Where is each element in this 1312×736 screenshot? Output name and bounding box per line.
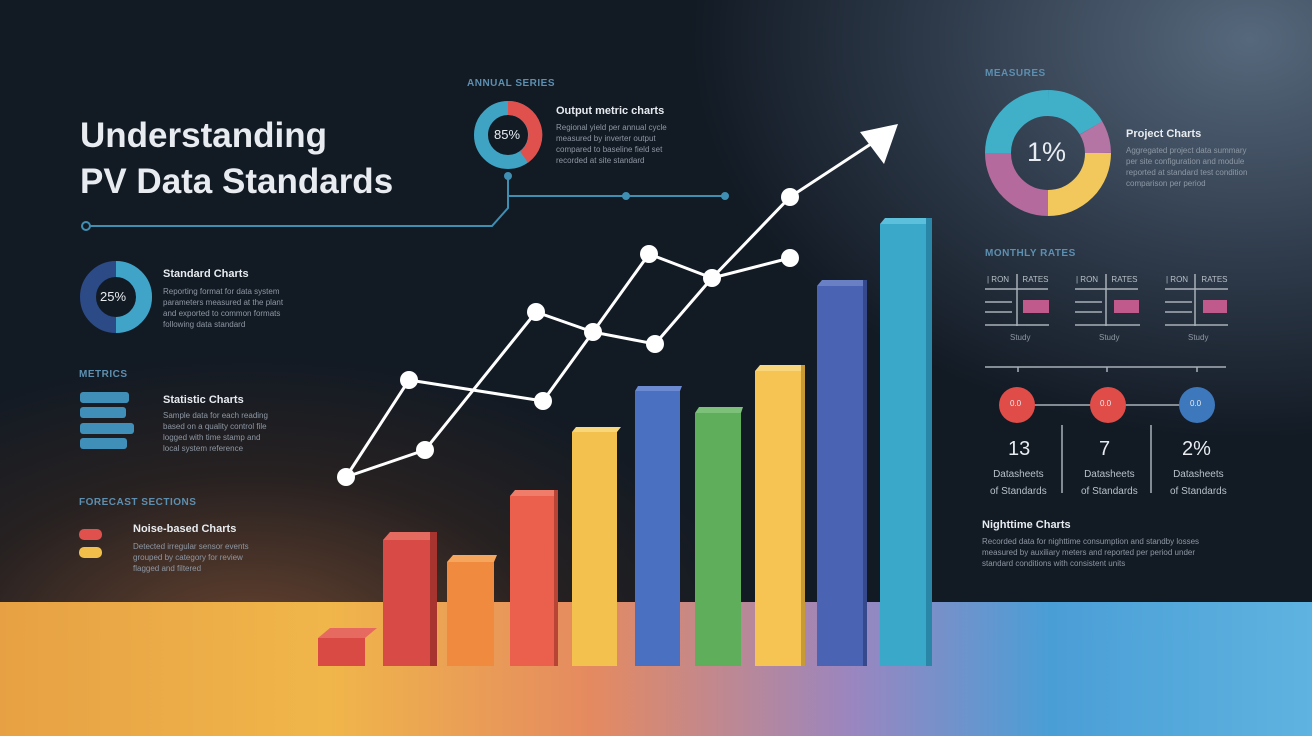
tables	[985, 274, 1228, 493]
text: logged with time stamp and	[163, 433, 260, 442]
text: of Standards	[1170, 486, 1227, 497]
donut labels: 85%	[494, 127, 520, 142]
text: FORECAST SECTIONS	[79, 497, 196, 508]
donut 85%	[481, 108, 535, 162]
text: Reporting format for data system	[163, 287, 280, 296]
text: Nighttime Charts	[982, 519, 1071, 531]
donut 1%	[998, 103, 1098, 203]
text: | RON RATES	[1166, 275, 1228, 284]
title: PV Data Standards	[80, 162, 393, 201]
text: Statistic Charts	[163, 394, 244, 406]
text: reported at standard test condition	[1126, 168, 1247, 177]
text: Datasheets	[1173, 469, 1224, 480]
text: parameters measured at the plant	[163, 298, 283, 307]
text: compared to baseline field set	[556, 145, 662, 154]
text: of Standards	[990, 486, 1047, 497]
text: Detected irregular sensor events	[133, 542, 249, 551]
text: Datasheets	[993, 469, 1044, 480]
text: 2%	[1182, 438, 1211, 460]
text: 0.0	[1010, 399, 1021, 408]
text: Standard Charts	[163, 268, 249, 280]
floor	[0, 602, 1312, 736]
text: measured by auxiliary meters and reported per period under	[982, 548, 1195, 557]
connector line	[82, 173, 728, 230]
text: measured by inverter output	[556, 134, 656, 143]
title: Understanding	[80, 116, 327, 155]
text: 25%	[100, 289, 126, 304]
text blocks: Output metric charts	[556, 105, 664, 117]
title	[80, 116, 393, 201]
text: Recorded data for nighttime consumption and standby losses	[982, 537, 1199, 546]
line chart with arrow	[337, 124, 898, 486]
text: | RON RATES	[1076, 275, 1138, 284]
text: Study	[1099, 333, 1119, 342]
text: based on a quality control file	[163, 422, 267, 431]
text: Noise-based Charts	[133, 523, 236, 535]
text: local system reference	[163, 444, 243, 453]
section labels: ANNUAL SERIES	[467, 78, 555, 89]
text: Aggregated project data summary	[1126, 146, 1247, 155]
text: METRICS	[79, 369, 128, 380]
text: MONTHLY RATES	[985, 248, 1076, 259]
text: 1%	[1027, 137, 1066, 167]
text: recorded at site standard	[556, 156, 644, 165]
circles	[999, 387, 1035, 423]
text: standard conditions with consistent units	[982, 559, 1125, 568]
bar chart	[318, 218, 932, 666]
text: and exported to common formats	[163, 309, 280, 318]
donut 25%	[88, 269, 144, 325]
text: Project Charts	[1126, 128, 1201, 140]
text: grouped by category for review	[133, 553, 243, 562]
text: 0.0	[1190, 399, 1201, 408]
text: comparison per period	[1126, 179, 1206, 188]
text: of Standards	[1081, 486, 1138, 497]
text: MEASURES	[985, 68, 1046, 79]
table headers: | RON RATES	[987, 275, 1048, 284]
text: Regional yield per annual cycle	[556, 123, 667, 132]
text: Study	[1010, 333, 1030, 342]
text: following data standard	[163, 320, 245, 329]
text: Datasheets	[1084, 469, 1135, 480]
text: Study	[1188, 333, 1208, 342]
mini bars	[80, 392, 134, 449]
text: 0.0	[1100, 399, 1111, 408]
text: Sample data for each reading	[163, 411, 268, 420]
text: 7	[1099, 438, 1110, 460]
stats: 13	[1008, 438, 1030, 460]
text: flagged and filtered	[133, 564, 201, 573]
text: per site configuration and module	[1126, 157, 1244, 166]
